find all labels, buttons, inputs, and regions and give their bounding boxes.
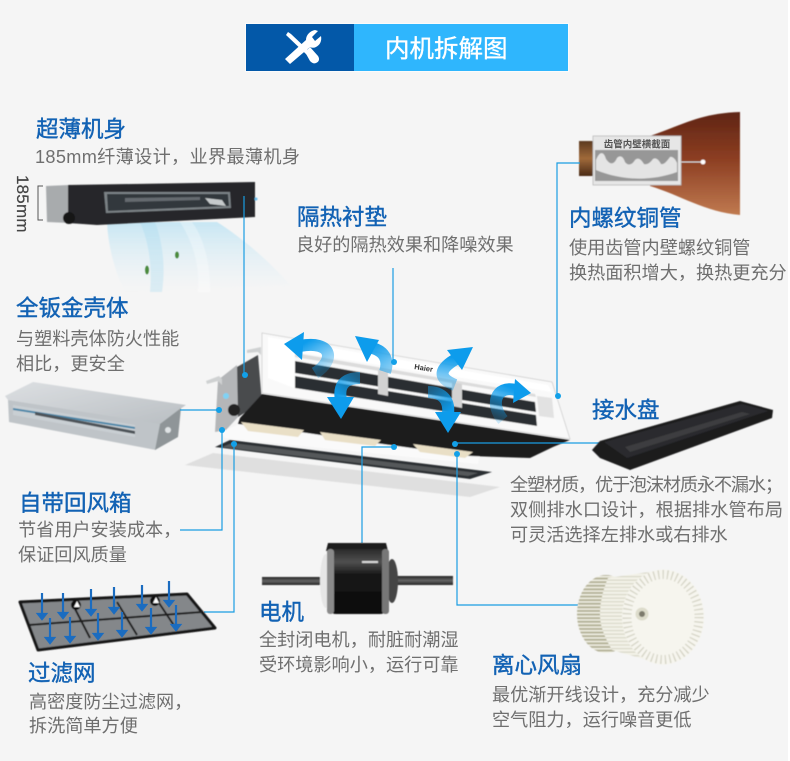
text: copper tube description bbox=[569, 238, 787, 283]
heading: centrifugal fan: 离心风扇 bbox=[492, 653, 582, 678]
slim unit illustration bbox=[46, 182, 258, 225]
white panel frame bbox=[262, 333, 570, 439]
leader line: insulation liner bbox=[391, 268, 397, 365]
header banner: 内机拆解图 bbox=[385, 35, 508, 63]
leader line: copper tube bbox=[555, 163, 580, 399]
dimension bracket 185mm: 185mm bbox=[13, 175, 32, 233]
text: drain pan description bbox=[510, 475, 783, 545]
heading: slim body: 超薄机身 bbox=[36, 117, 126, 142]
heading: insulation liner: 隔热衬垫 bbox=[297, 205, 387, 230]
text: sheet metal description: 相比，更安全 bbox=[16, 354, 125, 374]
text: return-air box description: 节省用户安装成本， bbox=[18, 520, 181, 540]
centrifugal fan illustration bbox=[577, 570, 704, 665]
airflow arrows bbox=[284, 332, 531, 433]
leader line: motor bbox=[362, 444, 397, 543]
leader line: centrifugal fan bbox=[454, 451, 578, 605]
filter illustration bbox=[20, 581, 215, 650]
leader line: sheet metal shell bbox=[180, 407, 222, 413]
heading: sheet metal shell: 全钣金壳体 bbox=[16, 296, 129, 321]
text: filter description: 拆洗简单方便 bbox=[29, 716, 138, 736]
text: motor description: 受环境影响小，运行可靠 bbox=[259, 655, 459, 675]
panel corner badge bbox=[537, 396, 554, 418]
leader line: return-air box bbox=[180, 427, 225, 530]
text: return-air box description bbox=[18, 520, 181, 565]
text: centrifugal fan description: 最优渐开线设计，充分减少 bbox=[492, 685, 710, 705]
text: centrifugal fan description bbox=[492, 685, 710, 730]
text: sheet metal description bbox=[16, 329, 179, 374]
label: tube cross section: 齿管内壁横截面 bbox=[604, 138, 671, 150]
text: insulation description: 良好的隔热效果和降噪效果 bbox=[296, 235, 514, 255]
leader line: drain pan bbox=[452, 441, 600, 447]
air slots bbox=[295, 361, 536, 412]
text: centrifugal fan description: 空气阻力，运行噪音更低 bbox=[492, 710, 692, 730]
text: filter description bbox=[29, 692, 192, 736]
white frame strip bbox=[220, 424, 480, 464]
heading: inner-groove copper tube: 内螺纹铜管 bbox=[569, 206, 682, 231]
text: filter description: 高密度防尘过滤网， bbox=[29, 692, 192, 712]
heading: return-air box: 自带回风箱 bbox=[19, 491, 132, 516]
text: sheet metal description: 与塑料壳体防火性能 bbox=[16, 329, 179, 349]
text: copper tube description: 使用齿管内壁螺纹铜管 bbox=[569, 238, 750, 258]
side plate bbox=[215, 365, 238, 432]
leader line: filter bbox=[204, 441, 237, 612]
black body bbox=[238, 394, 570, 458]
leader line: slim body bbox=[242, 196, 248, 378]
wind stream below slim unit bbox=[107, 222, 290, 292]
icon: wrench and screwdriver bbox=[285, 30, 321, 64]
heading: filter: 过滤网 bbox=[28, 661, 96, 686]
main indoor unit illustration bbox=[185, 332, 570, 497]
dimension bracket 185mm bbox=[13, 175, 43, 233]
fan vents bbox=[241, 422, 304, 437]
text: motor description: 全封闭电机，耐脏耐潮湿 bbox=[259, 630, 459, 650]
heading: motor: 电机 bbox=[259, 600, 305, 625]
motor illustration bbox=[262, 543, 453, 614]
brand logo: Haier bbox=[414, 362, 434, 374]
header banner bbox=[245, 23, 569, 72]
text: drain pan description: 双侧排水口设计，根据排水管布局 bbox=[510, 500, 783, 520]
copper tube illustration bbox=[579, 112, 740, 215]
bottom cover plate bbox=[185, 453, 500, 497]
drain pan illustration bbox=[592, 401, 773, 470]
text: motor description bbox=[259, 630, 459, 675]
text: drain pan description: 全塑材质，优于泡沫材质永不漏水； bbox=[510, 475, 783, 495]
heading: drain pan: 接水盘 bbox=[592, 398, 660, 423]
text: slim body description: 185mm纤薄设计，业界最薄机身 bbox=[35, 147, 300, 167]
black return-air grille bbox=[215, 440, 492, 479]
text: drain pan description: 可灵活选择左排水或右排水 bbox=[510, 525, 728, 545]
text: return-air box description: 保证回风质量 bbox=[18, 545, 127, 565]
filter arrows bbox=[38, 581, 180, 643]
text: copper tube description: 换热面积增大，换热更充分 bbox=[569, 263, 787, 283]
sheet metal duct unit illustration bbox=[5, 382, 186, 450]
